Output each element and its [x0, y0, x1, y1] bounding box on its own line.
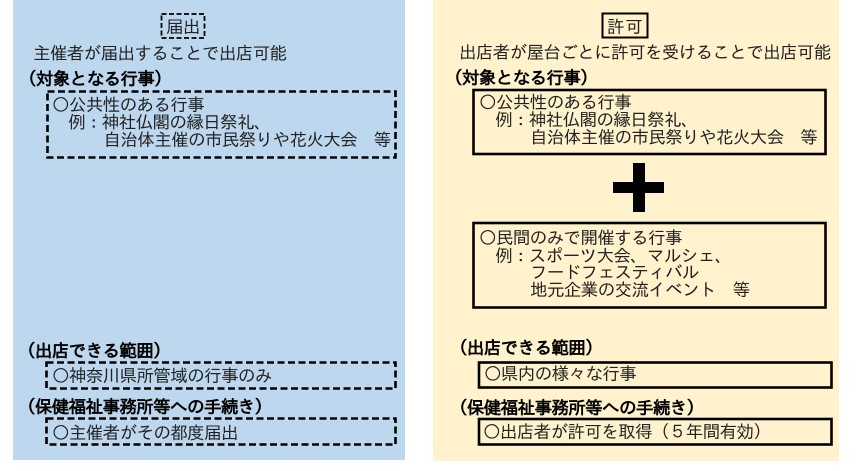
heading: 保健福祉事務所等への手続き: （保健福祉事務所等への手続き） — [450, 398, 703, 417]
box: 民間のみで開催する行事: ○民間のみで開催する行事 — [479, 229, 682, 247]
box: 民間のみで開催する行事: 例：スポーツ大会、マルシェ、 — [495, 247, 732, 265]
panel: 許可 — [433, 0, 839, 461]
box: 対象行事 — [48, 92, 396, 158]
box: 出店範囲: ○県内の様々な行事 — [484, 365, 636, 383]
box: 出店範囲 — [46, 362, 396, 388]
box: 対象行事: ○公共性のある行事 — [52, 96, 204, 114]
box: 対象行事: 自治体主催の市民祭りや花火大会 等 — [104, 131, 391, 149]
box: 民間のみで開催する行事 — [474, 223, 826, 308]
heading: 出店できる範囲: （出店できる範囲） — [450, 338, 602, 357]
icon: plus — [613, 163, 664, 212]
heading: 出店できる範囲: （出店できる範囲） — [18, 341, 170, 360]
heading: 許可 — [602, 14, 648, 38]
heading: 届出 — [162, 14, 204, 38]
heading: 対象となる行事: （対象となる行事） — [445, 68, 597, 87]
box: 手続き: ○出店者が許可を取得（５年間有効） — [483, 423, 770, 441]
box: 対象行事: 例：神社仏閣の縁日祭礼、 — [68, 114, 271, 132]
box: 公共性のある行事 — [474, 90, 826, 154]
heading: 保健福祉事務所等への手続き: （保健福祉事務所等への手続き） — [18, 397, 271, 416]
box: 公共性のある行事: 例：神社仏閣の縁日祭礼、 — [495, 111, 698, 129]
box: 公共性のある行事: ○公共性のある行事 — [479, 94, 631, 112]
box: 手続き: ○主催者がその都度届出 — [52, 424, 238, 442]
heading: 届出: 届出 — [166, 18, 200, 36]
box: 手続き — [46, 418, 396, 444]
text: 許可 summary: 出店者が屋台ごとに許可を受けることで出店可能 — [459, 44, 831, 62]
heading: 対象となる行事: （対象となる行事） — [19, 69, 171, 88]
panel: 届出 — [13, 0, 405, 460]
box: 民間のみで開催する行事: 地元企業の交流イベント 等 — [530, 281, 750, 299]
box: 出店範囲: ○神奈川県所管域の行事のみ — [52, 367, 272, 385]
heading: 許可: 許可 — [607, 18, 643, 36]
box: 出店範囲 — [479, 362, 832, 388]
box: 手続き — [479, 419, 832, 444]
box: 民間のみで開催する行事: フードフェスティバル — [530, 264, 699, 282]
box: 公共性のある行事: 自治体主催の市民祭りや花火大会 等 — [530, 128, 817, 146]
text: 届出 summary: 主催者が届出することで出店可能 — [33, 44, 287, 62]
